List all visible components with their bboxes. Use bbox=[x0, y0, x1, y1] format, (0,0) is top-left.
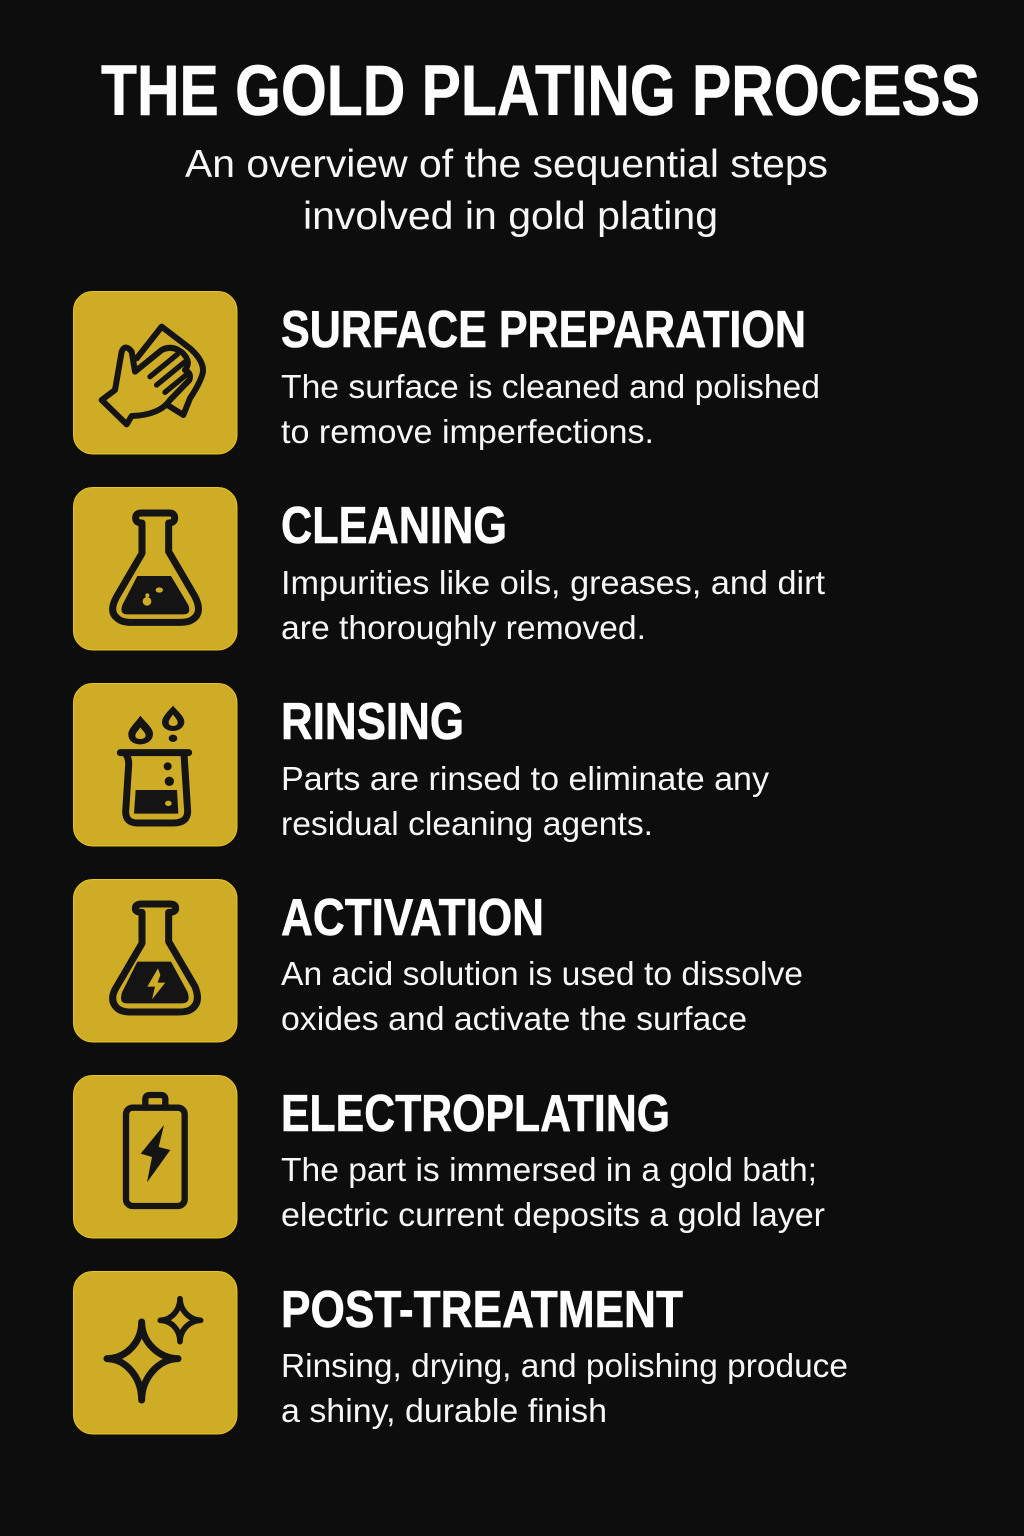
description: electroplating bbox=[281, 1151, 825, 1233]
icon: hand wiping with cloth bbox=[74, 292, 237, 454]
heading: activation: ACTIVATION bbox=[281, 889, 544, 947]
heading: post-treatment: POST-TREATMENT bbox=[281, 1281, 683, 1339]
panel: electroplating bbox=[74, 1076, 825, 1238]
icon: flask with liquid bbox=[74, 488, 237, 650]
panel: post-treatment bbox=[74, 1272, 848, 1434]
description: surface preparation bbox=[281, 368, 820, 450]
subtitle: involved in gold plating bbox=[303, 195, 718, 238]
icon: sparkles bbox=[74, 1272, 237, 1434]
description: surface preparation: to remove imperfections. bbox=[281, 413, 654, 450]
panel: activation bbox=[74, 880, 803, 1042]
heading: surface preparation: SURFACE PREPARATION bbox=[281, 301, 806, 359]
heading: cleaning: CLEANING bbox=[281, 497, 507, 555]
description: post-treatment: Rinsing, drying, and polishing produce bbox=[281, 1347, 848, 1384]
icon: battery with lightning bolt bbox=[74, 1076, 237, 1238]
description: cleaning: are thoroughly removed. bbox=[281, 609, 646, 646]
description: activation: An acid solution is used to dissolve bbox=[281, 955, 803, 992]
description: rinsing: Parts are rinsed to eliminate any bbox=[281, 760, 770, 797]
description: post-treatment: a shiny, durable finish bbox=[281, 1392, 607, 1429]
subtitle: An overview of the sequential steps bbox=[185, 143, 828, 186]
description: rinsing bbox=[281, 760, 770, 842]
heading: electroplating: ELECTROPLATING bbox=[281, 1085, 670, 1143]
description: electroplating: The part is immersed in a gold bath; bbox=[281, 1151, 817, 1188]
panel: surface preparation bbox=[74, 292, 820, 454]
description: cleaning bbox=[281, 564, 825, 646]
icon: beaker with drops bbox=[74, 684, 237, 846]
panel: cleaning bbox=[74, 488, 825, 650]
subtitle bbox=[185, 143, 828, 238]
description: cleaning: Impurities like oils, greases, and dirt bbox=[281, 564, 825, 601]
description: post-treatment bbox=[281, 1347, 848, 1429]
description: activation: oxides and activate the surface bbox=[281, 1000, 747, 1037]
description: electroplating: electric current deposits a gold layer bbox=[281, 1196, 825, 1233]
panel: rinsing bbox=[74, 684, 770, 846]
description: rinsing: residual cleaning agents. bbox=[281, 805, 653, 842]
description: activation bbox=[281, 955, 803, 1037]
icon: flask with lightning bolt bbox=[74, 880, 237, 1042]
description: surface preparation: The surface is cleaned and polished bbox=[281, 368, 820, 405]
heading: rinsing: RINSING bbox=[281, 693, 464, 751]
